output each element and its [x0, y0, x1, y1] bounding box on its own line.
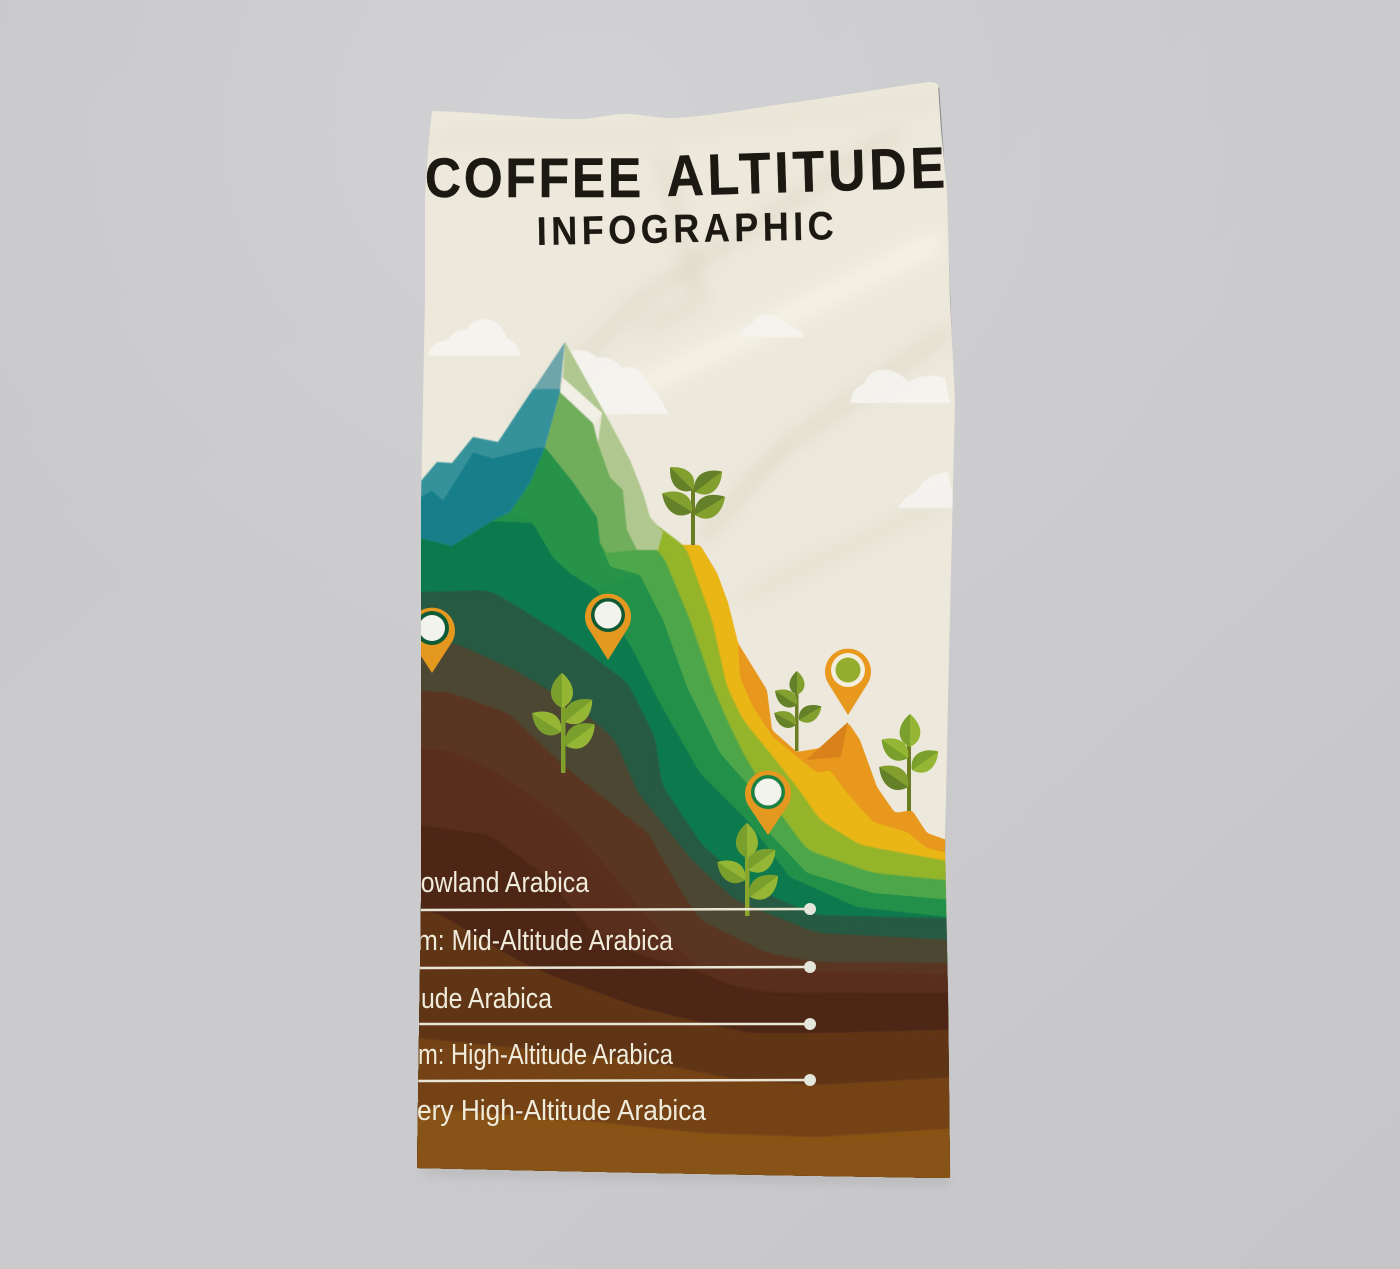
green face [510, 447, 640, 590]
mid teal ridge [415, 389, 561, 500]
towel edge shadow [938, 88, 953, 1176]
leader line 3 [415, 1018, 816, 1030]
label: lowland: Lowland Arabica [407, 867, 590, 899]
plant on slope base [712, 823, 785, 916]
pale ridge [563, 342, 663, 550]
leader line 4 [415, 1074, 816, 1086]
soil strata [417, 691, 950, 1178]
plant at right [873, 714, 944, 811]
orange slope [682, 544, 946, 910]
leader line 2 [415, 961, 816, 973]
leader line 1 [415, 903, 816, 915]
soil band 2 [418, 751, 949, 1055]
plant on summit ridge [656, 460, 731, 545]
light green face [545, 392, 637, 553]
plant on mountain face [526, 673, 602, 773]
clouds [428, 314, 955, 508]
fabric folds [628, 250, 937, 529]
title [426, 147, 944, 245]
label: very high-altitude: Very High-Altitude Arabica [401, 1095, 707, 1127]
lime band [598, 521, 946, 914]
soil band 3 [418, 826, 950, 1107]
deep teal face [415, 447, 545, 546]
label: altitude: ude Arabica [421, 983, 553, 1015]
soil band 5 [418, 1038, 950, 1137]
leader lines [415, 903, 816, 1086]
plant on foothill [770, 671, 826, 751]
label: mid-altitude: m: Mid-Altitude Arabica [417, 925, 674, 957]
orange peak shade [806, 722, 848, 760]
subtitle: INFOGRAPHIC [536, 205, 834, 254]
soil band 4 [419, 912, 949, 1085]
cloud 3 [739, 314, 805, 337]
olive band [420, 642, 948, 984]
mountain peak [415, 342, 663, 590]
dark green band [418, 521, 949, 1052]
mid green band [420, 452, 948, 981]
towel shadow [425, 1168, 950, 1184]
cloud 5 [898, 472, 955, 508]
cloud 2 [570, 350, 668, 414]
cloud 1 [428, 319, 521, 356]
towel panel [417, 82, 955, 1178]
label: high-altitude: m: High-Altitude Arabica [418, 1039, 674, 1071]
cream cloth [422, 82, 955, 862]
green band [421, 538, 948, 958]
slope bands [417, 452, 950, 1178]
cloud 4 [850, 370, 950, 403]
altitude pin 4 [745, 771, 791, 835]
snow highlight [560, 378, 602, 424]
teal-dark band [420, 590, 948, 963]
light teal tip [533, 342, 565, 390]
altitude pin 2 [585, 594, 631, 660]
soil band 6 [417, 1108, 950, 1178]
altitude pin 3 [825, 649, 871, 715]
yellow band [682, 544, 947, 929]
title word: COFFEE: COFFEE [425, 147, 641, 210]
title word: ALTITUDE: ALTITUDE [665, 134, 946, 209]
altitude pin 1 [421, 608, 455, 673]
soil band 1 [419, 691, 948, 1016]
altitude labels [401, 867, 707, 1127]
